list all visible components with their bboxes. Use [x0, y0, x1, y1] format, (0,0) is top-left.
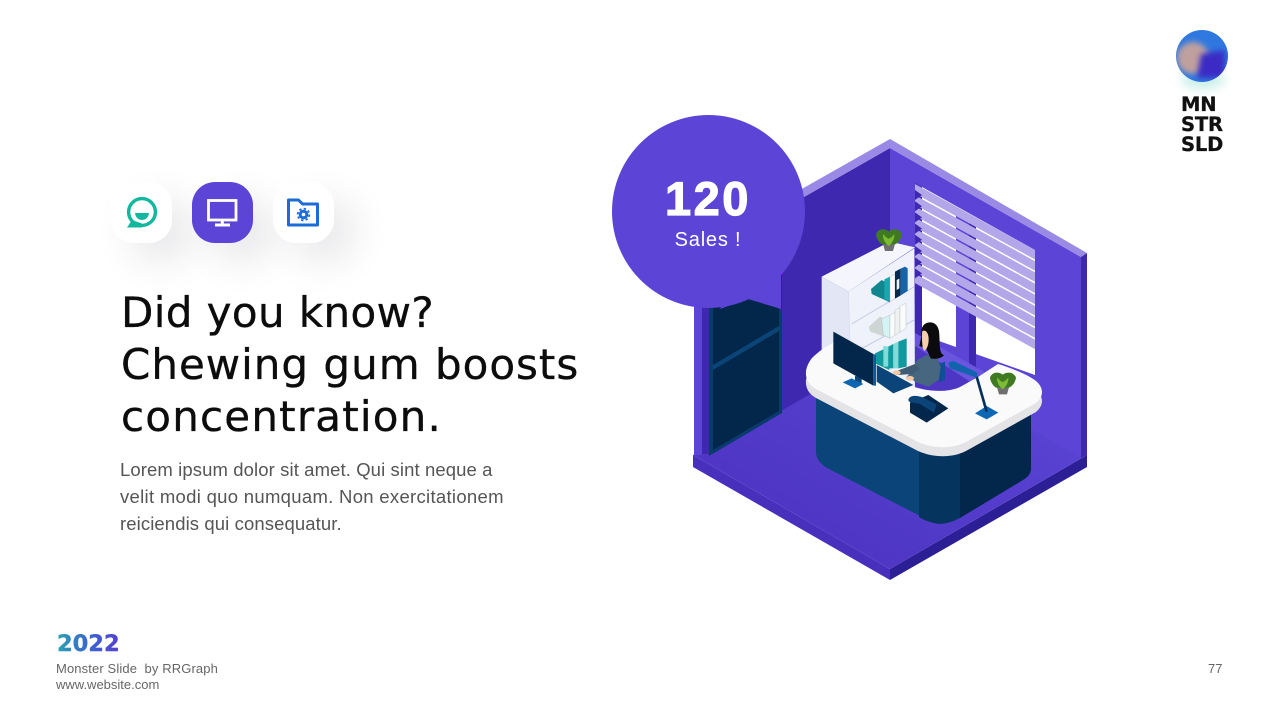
- binders middle shelf: [869, 303, 906, 338]
- logo: [1176, 30, 1228, 156]
- icon row: [126, 182, 356, 263]
- logo wordmark: STR: [1181, 113, 1223, 136]
- speech bubble: [612, 115, 805, 309]
- logo wordmark: MN: [1181, 93, 1216, 116]
- window with blinds: [905, 183, 1035, 395]
- desk base: [816, 385, 1031, 524]
- footer credit: Monster Slide by RRGraph: [56, 661, 218, 676]
- monitor: [833, 332, 876, 388]
- telephone: [908, 395, 948, 423]
- reception desk: [806, 343, 1042, 524]
- desk lamp: [948, 361, 998, 419]
- heading: [121, 288, 579, 441]
- body text: velit modi quo numquam. Non exercitationem: [120, 486, 504, 507]
- binders top shelf: [871, 267, 908, 302]
- keyboard: [877, 365, 913, 393]
- binders bottom shelf: [875, 338, 907, 370]
- bookshelf: [822, 242, 915, 400]
- bubble number: 120: [665, 172, 751, 225]
- logo sphere: [1176, 30, 1228, 94]
- icon: monitor: [192, 182, 253, 243]
- door: [709, 270, 782, 456]
- body text: Lorem ipsum dolor sit amet. Qui sint neque a: [120, 459, 493, 480]
- icon: settings folder: [273, 182, 334, 243]
- person: [893, 322, 945, 387]
- heading: concentration.: [121, 392, 442, 441]
- plant on shelf: [876, 229, 902, 251]
- footer credit: www.website.com: [56, 677, 159, 692]
- desk top: [806, 343, 1042, 447]
- bubble label: Sales !: [675, 229, 741, 251]
- desk top edge: [806, 352, 1042, 456]
- logo wordmark: SLD: [1181, 133, 1223, 156]
- body text: reiciendis qui consequatur.: [120, 513, 342, 534]
- heading: Did you know?: [121, 288, 434, 337]
- desk area drawn in zoomed coordinates: [806, 229, 1042, 524]
- heading: Chewing gum boosts: [121, 340, 579, 389]
- room shell: [693, 139, 1087, 580]
- body text: [120, 459, 504, 534]
- plant on desk: [990, 373, 1016, 394]
- footer credit: [56, 661, 218, 692]
- logo wordmark: [1181, 93, 1223, 156]
- page number: 77: [1208, 661, 1222, 676]
- year label: 2022: [57, 631, 120, 657]
- icon: chat bubble: [111, 182, 172, 243]
